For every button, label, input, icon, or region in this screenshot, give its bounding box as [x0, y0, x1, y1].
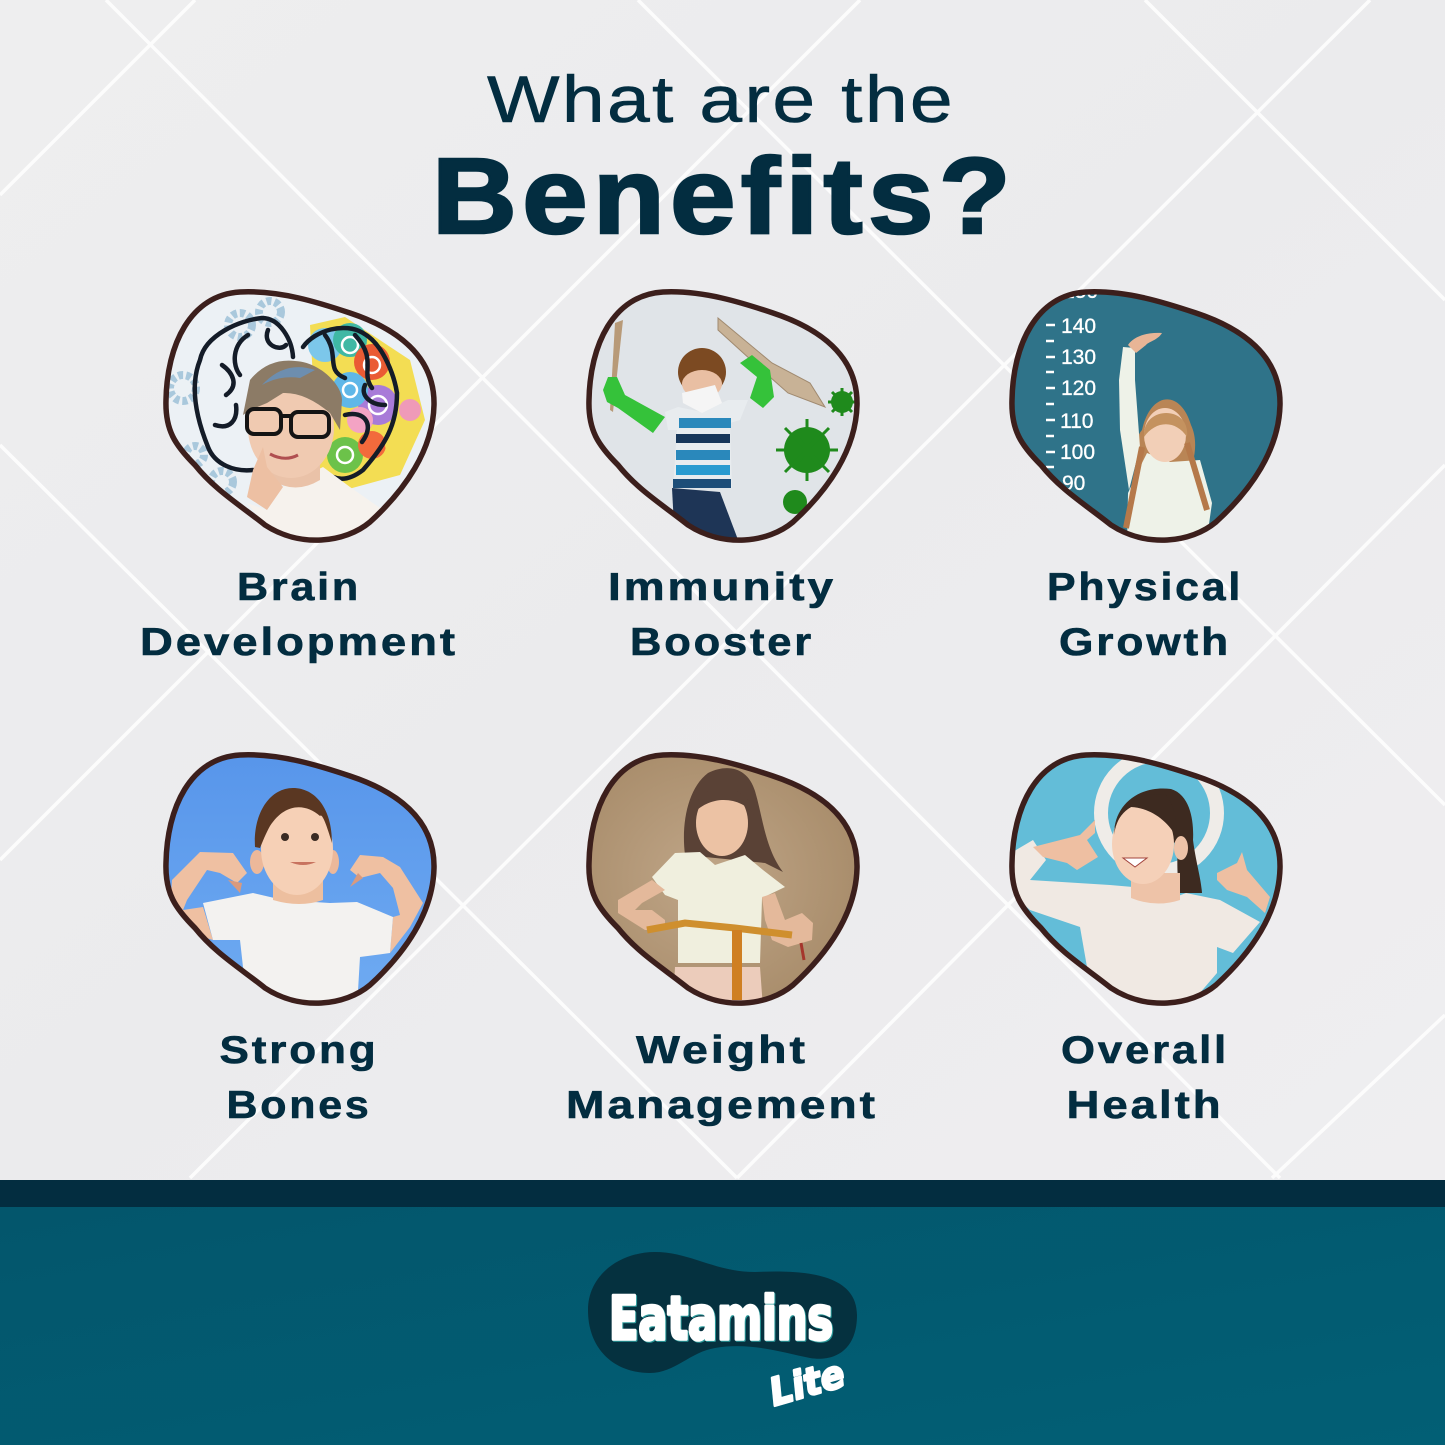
photo: girl measuring height: 120 [1061, 377, 1096, 400]
label: Strong Bones: Strong [220, 1029, 378, 1072]
brown blob outline [166, 755, 434, 1003]
label: Immunity Booster: Immunity [608, 566, 836, 609]
panel: physical growth [1006, 280, 1286, 664]
photo: girl measuring height [1014, 294, 1278, 536]
label: Strong Bones [220, 1029, 378, 1127]
photo: girl measuring height: 140 [1061, 315, 1096, 338]
brown blob outline [166, 292, 434, 540]
label: Immunity Booster: Booster [630, 621, 814, 664]
label: Brain Development: Brain [237, 566, 361, 609]
panel: weight management [566, 748, 878, 1127]
photo: girl with measuring tape [592, 758, 854, 1000]
label: Strong Bones: Bones [226, 1084, 372, 1127]
label: Overall Health [1061, 1029, 1229, 1127]
photo: girl thumbs up [1015, 758, 1278, 1000]
brown blob outline [589, 755, 857, 1003]
label: Brain Development [140, 566, 458, 664]
heading [432, 62, 1016, 256]
photo: girl measuring height: 90 [1062, 472, 1085, 495]
logo: Eatamins Lite: Lite [764, 1351, 850, 1415]
panel: strong bones [160, 748, 440, 1127]
photo: girl measuring height: 100 [1060, 441, 1095, 464]
label: Physical Growth [1047, 566, 1243, 664]
label: Weight Management [566, 1029, 878, 1127]
label: Weight Management: Management [566, 1084, 878, 1127]
panel: brain development [140, 285, 458, 664]
logo: Eatamins Lite [588, 1252, 857, 1415]
label: Overall Health: Overall [1061, 1029, 1229, 1072]
footer band [0, 1180, 1445, 1445]
panel: overall health [1006, 748, 1286, 1127]
photo: boy with mask and virus [592, 294, 854, 538]
brown blob outline [589, 292, 857, 540]
panel: immunity booster [583, 285, 863, 664]
photo: boy with brain [168, 297, 428, 537]
label: Weight Management: Weight [636, 1029, 808, 1072]
brown blob outline [1012, 755, 1280, 1003]
label: Immunity Booster [608, 566, 836, 664]
label: Physical Growth: Physical [1047, 566, 1243, 609]
brown blob outline [1012, 292, 1280, 540]
logo: Eatamins Lite: Eatamins [609, 1284, 833, 1354]
photo: girl measuring height: 130 [1061, 346, 1096, 369]
label: Overall Health: Health [1066, 1084, 1224, 1127]
photo: girl measuring height: 150 [1063, 280, 1098, 303]
photo: boy flexing [168, 758, 432, 990]
label: Physical Growth: Growth [1059, 621, 1231, 664]
heading line: Benefits?: Benefits? [432, 135, 1016, 256]
label: Brain Development: Development [140, 621, 458, 664]
heading line: What are the: What are the [487, 62, 955, 136]
photo: girl measuring height: 110 [1060, 410, 1093, 433]
